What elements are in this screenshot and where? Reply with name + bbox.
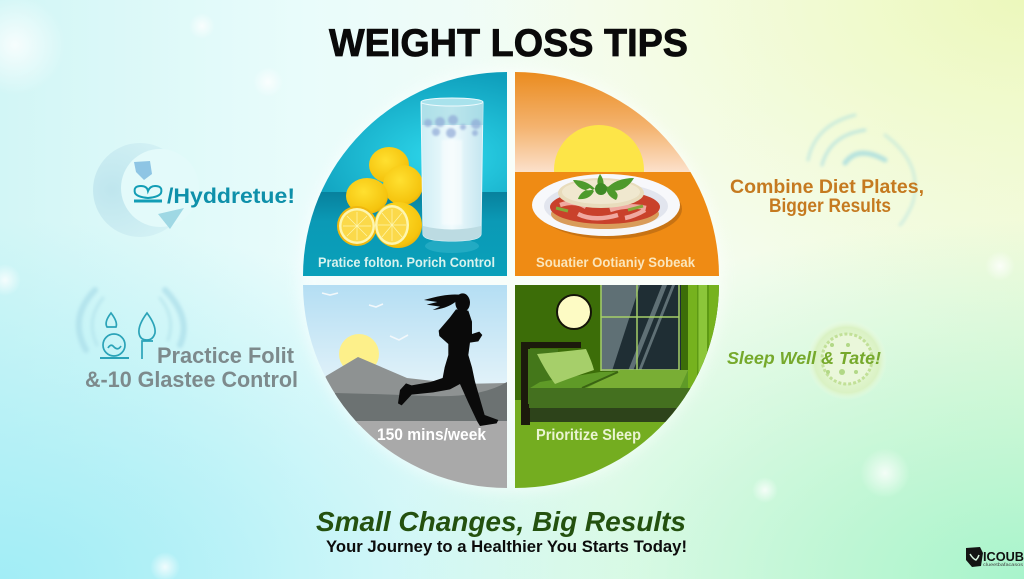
panel: exercise quadrant <box>300 285 510 491</box>
callout text: Bigger Results <box>769 196 891 217</box>
watermark logo: clueetbafacasos <box>983 562 1024 567</box>
quadrant label: Pratice folton. Porich Control <box>318 255 495 270</box>
icon: ripple arcs <box>808 115 915 225</box>
callout: combine diet <box>730 115 929 225</box>
callout: hydrate <box>93 143 295 237</box>
title: WEIGHT LOSS TIPS <box>329 22 688 65</box>
watermark logo <box>966 547 1024 567</box>
icon: flame and drop <box>100 313 155 359</box>
quadrant label: Souatier Ootianiy Sobeak <box>536 255 695 270</box>
icon: crescent with arrows <box>93 143 199 237</box>
icon: glass of water <box>421 98 483 253</box>
quadrant label: 150 mins/week <box>377 425 486 444</box>
callout text: Sleep Well & Tate! <box>727 348 881 368</box>
callout text: /Hyddretue! <box>167 185 295 208</box>
callout: sleep well <box>727 320 887 400</box>
icon: curtains <box>688 285 719 392</box>
panel: hydration quadrant <box>300 70 510 278</box>
icon: window <box>601 285 681 371</box>
icon: green badge <box>807 320 887 400</box>
icon: plate of food <box>532 174 682 239</box>
icon: signal arcs <box>79 290 184 350</box>
quadrant label: Prioritize Sleep <box>536 427 641 444</box>
icon: bed <box>521 342 700 425</box>
panel: diet quadrant <box>515 70 721 278</box>
tagline <box>316 506 687 556</box>
icon: moon <box>557 295 591 329</box>
watermark logo: ICOUB <box>983 549 1024 564</box>
tagline: Your Journey to a Healthier You Starts Today! <box>326 538 687 556</box>
callout text: Combine Diet Plates, <box>730 177 924 198</box>
callout text: Practice Folit <box>157 343 295 368</box>
callout: portion control <box>79 290 300 392</box>
callout text: &-10 Glastee Control <box>85 367 298 392</box>
tagline: Small Changes, Big Results <box>316 506 686 537</box>
icon: lemons <box>337 147 423 248</box>
icon: hydrate emblem <box>134 186 162 201</box>
icon: runner silhouette <box>398 293 498 426</box>
panel: sleep quadrant <box>515 285 722 490</box>
